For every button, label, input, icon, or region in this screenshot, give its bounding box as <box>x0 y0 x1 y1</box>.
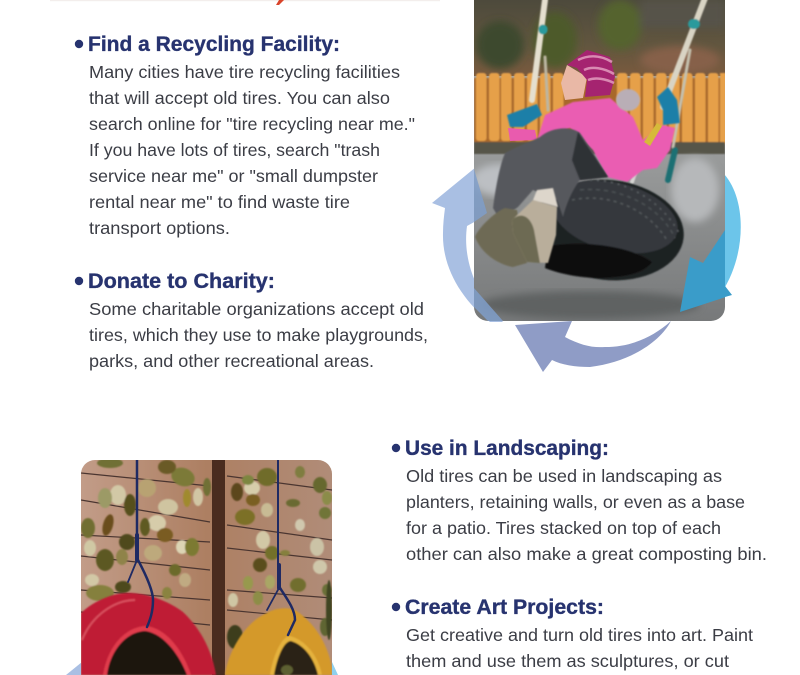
text block: donate body <box>89 299 428 371</box>
post <box>212 460 225 675</box>
yellow tire <box>225 608 332 675</box>
leaves <box>81 458 332 649</box>
photo: child on tire swing <box>472 0 732 321</box>
text block: recycling facility body: Many cities have tire recycling facilities <box>89 62 400 82</box>
heading: find a recycling facility: Find a Recycling Facility: <box>88 33 340 56</box>
boots <box>475 188 558 267</box>
text block: recycling facility body: rental near me" to find waste tire <box>89 192 350 212</box>
heading: create art projects: Create Art Projects: <box>405 596 604 619</box>
head and hat <box>561 65 587 100</box>
arrowhead overlays <box>680 230 725 312</box>
text block: landscaping body <box>406 466 767 564</box>
heading: donate to charity: Donate to Charity: <box>88 270 275 293</box>
text block: recycling facility body: service near me" or "small dumpster <box>89 166 378 186</box>
arrow: right cyan <box>722 172 741 292</box>
mittens <box>507 104 542 127</box>
cycle arrows behind the swing photo <box>432 167 741 372</box>
arrow: bottom indigo <box>515 321 671 372</box>
text block: donate body: Some charitable organizations accept old <box>89 299 424 319</box>
wood planks <box>81 473 332 625</box>
tire <box>542 178 685 282</box>
arrow fragments beside lower photo <box>66 662 338 675</box>
text block: landscaping body: for a patio. Tires stacked on top of each <box>406 518 721 538</box>
heading: use in landscaping: Use in Landscaping: <box>405 437 609 460</box>
text block: art projects body: them and use them as sculptures, or cut <box>406 651 729 671</box>
jacket <box>537 98 675 182</box>
text block: donate body: parks, and other recreational areas. <box>89 351 374 371</box>
text block: landscaping body: Old tires can be used in landscaping as <box>406 466 722 486</box>
section: landscaping text <box>392 437 767 564</box>
section: recycling facility text <box>75 33 415 238</box>
arrow: left light blue <box>432 167 503 322</box>
fence <box>474 73 726 154</box>
section: donate to charity text <box>75 270 428 371</box>
ropes <box>128 460 295 635</box>
text block: art projects body <box>406 625 753 671</box>
text block: landscaping body: planters, retaining walls, or even as a base <box>406 492 745 512</box>
ropes <box>532 0 705 182</box>
text block: landscaping body: other can also make a great composting bin. <box>406 544 767 564</box>
text block: recycling facility body: that will accept old tires. You can also <box>89 88 390 108</box>
text block: recycling facility body: If you have lots of tires, search "trash <box>89 140 380 160</box>
section: art projects text <box>392 596 753 671</box>
clipped title remnant <box>50 0 440 5</box>
arrowhead tip outside photo <box>725 286 732 297</box>
text block: art projects body: Get creative and turn old tires into art. Paint <box>406 625 753 645</box>
text block: recycling facility body: transport options. <box>89 218 230 238</box>
photo: painted tire swings <box>81 458 332 675</box>
ground <box>671 158 719 222</box>
red tire <box>81 593 216 675</box>
trousers <box>493 128 608 220</box>
text block: recycling facility body <box>89 62 415 238</box>
text block: donate body: tires, which they use to make playgrounds, <box>89 325 428 345</box>
text block: recycling facility body: search online for "tire recycling near me." <box>89 114 415 134</box>
